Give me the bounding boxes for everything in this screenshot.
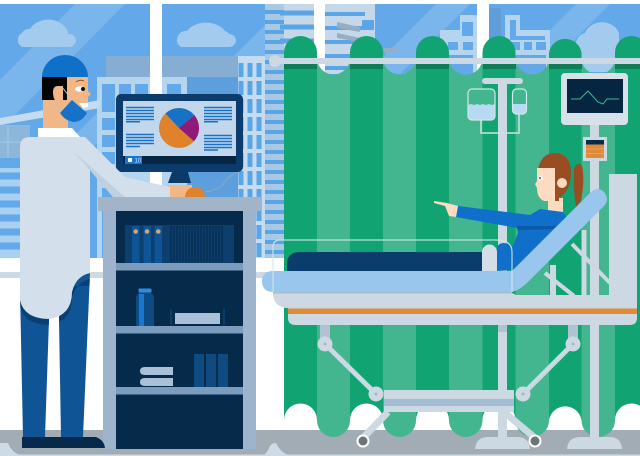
curtain rail [269, 55, 640, 67]
white window mullions [150, 4, 489, 258]
wall skirting band [0, 272, 284, 278]
building behind monitor [97, 77, 239, 258]
collar [38, 128, 80, 137]
ear [53, 86, 63, 104]
hair [538, 153, 571, 197]
IV bag right [512, 89, 526, 114]
coat shadow on trousers [20, 279, 90, 325]
distant building [106, 56, 240, 78]
computer monitor [116, 94, 243, 192]
hand [434, 201, 458, 217]
cloud left [18, 20, 76, 47]
cloud right [576, 22, 619, 72]
bed support struts [545, 230, 610, 296]
floor [0, 430, 640, 456]
bed head panel [609, 174, 637, 310]
bed rail [273, 240, 512, 292]
hair [42, 77, 67, 100]
vital signs monitor [561, 73, 628, 125]
grey box [171, 309, 224, 325]
tower [238, 4, 284, 258]
low building left [0, 100, 100, 258]
patient [434, 153, 583, 271]
pillar by patient [482, 245, 497, 271]
control box [583, 137, 607, 161]
desk top [98, 197, 262, 211]
trousers [20, 273, 90, 437]
cabinet [103, 205, 256, 449]
stacked books [140, 367, 173, 386]
IV base [475, 437, 530, 449]
IV tube [481, 114, 519, 133]
building upper right [440, 8, 550, 74]
neck [43, 100, 68, 128]
tall building upper centre [280, 4, 402, 74]
pie chart [159, 108, 199, 148]
wheels [356, 434, 542, 448]
pointing arm and shirt [456, 206, 568, 271]
lower binders [194, 354, 228, 387]
cap [42, 55, 88, 77]
bed undercarriage [318, 325, 580, 448]
neck [548, 198, 563, 212]
shoes [22, 437, 105, 448]
monitor pole [567, 125, 622, 449]
curtain [284, 36, 640, 437]
doctor [20, 55, 205, 448]
bottle [136, 288, 154, 326]
cloud centre [177, 23, 236, 47]
coat [20, 137, 170, 319]
text lines on screen [126, 108, 232, 150]
computer monitor: 10 [134, 158, 142, 164]
top shelf box and binders [125, 225, 234, 263]
face mask [53, 87, 88, 122]
bed frame [273, 293, 637, 325]
window with city skyline [0, 0, 640, 258]
IV stand [468, 78, 530, 449]
eye [75, 80, 85, 92]
face [535, 168, 555, 201]
hand [168, 185, 192, 197]
face [61, 77, 91, 115]
ponytail [574, 164, 583, 207]
blanket [287, 252, 482, 271]
mattress [262, 189, 607, 292]
mouse [185, 187, 205, 197]
IV bag left [468, 89, 495, 120]
